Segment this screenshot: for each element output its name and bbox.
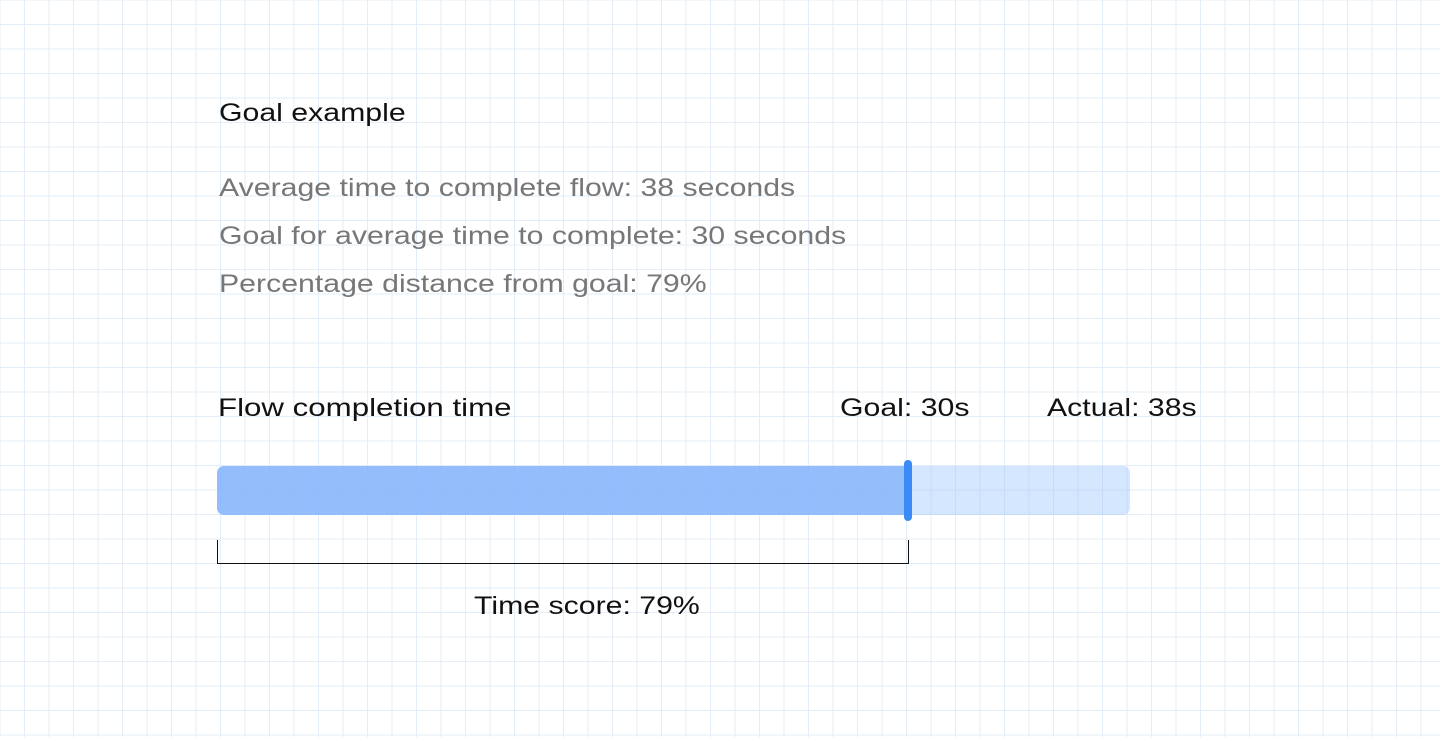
title: Goal example: [219, 99, 406, 127]
goal marker: [904, 460, 912, 521]
chart label: Flow completion time: [218, 394, 512, 422]
bar track: [217, 466, 1130, 515]
text block: stats: [219, 174, 846, 298]
text block: stats: Percentage distance from goal: 79%: [219, 270, 707, 298]
actual label: Actual: 38s: [1047, 394, 1197, 422]
progress bar: [217, 460, 1130, 521]
time score label: Time score: 79%: [474, 592, 700, 620]
bracket: [217, 540, 909, 564]
text block: stats: Goal for average time to complete: 30 seconds: [219, 222, 846, 250]
text block: stats: Average time to complete flow: 38 seconds: [219, 174, 795, 202]
bar fill: [217, 466, 908, 515]
goal label: Goal: 30s: [840, 394, 969, 422]
